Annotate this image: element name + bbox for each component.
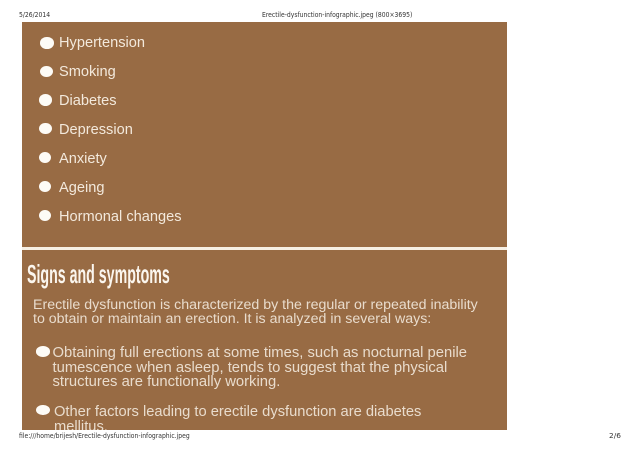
text: introduction [33, 297, 478, 327]
page date header: 5/26/2014 [19, 10, 50, 19]
text: ageing: Ageing [59, 180, 104, 196]
icon: bullet depression [39, 122, 52, 134]
text: introduction: Erectile dysfunction is characterized by the regular or repeated inability [33, 297, 478, 313]
page number footer: 2/6 [609, 431, 621, 440]
text: depression: Depression [59, 122, 133, 138]
text: introduction: to obtain or maintain an erection. It is analyzed in several ways: [33, 311, 431, 327]
icon: bullet second point [36, 404, 50, 415]
text: first point: structures are functionally working. [52, 374, 280, 390]
icon: bullet hypertension [40, 37, 54, 48]
text: first point: Obtaining full erections at some times, such as nocturnal penile [52, 345, 467, 361]
icon: bullet first point [36, 346, 50, 356]
text: hormonal changes: Hormonal changes [59, 209, 182, 225]
page file path footer: file:///home/brijesh/Erectile-dysfunction-infographic.jpeg [19, 431, 190, 440]
icon: bullet ageing [38, 180, 51, 192]
text: diabetes: Diabetes [59, 93, 117, 109]
heading: signs and symptoms: Signs and symptoms [27, 259, 170, 289]
text: hypertension: Hypertension [59, 35, 145, 51]
icon: bullet anxiety [38, 152, 51, 163]
page title header: Erectile-dysfunction-infographic.jpeg (800×3695) [262, 10, 412, 19]
icon: bullet diabetes [39, 94, 52, 106]
text: anxiety: Anxiety [59, 151, 107, 167]
icon: bullet smoking [40, 66, 53, 77]
panel: infographic image [22, 22, 506, 430]
text: smoking: Smoking [59, 64, 116, 80]
icon: bullet hormonal changes [38, 210, 51, 221]
list: risk factors [39, 35, 182, 225]
text: first point: tumescence when asleep, tends to suggest that the physical [52, 360, 447, 376]
text: first point [52, 345, 467, 390]
text: second point [54, 404, 421, 430]
text: second point: Other factors leading to erectile dysfunction are diabetes [54, 404, 421, 420]
divider line [22, 247, 506, 250]
